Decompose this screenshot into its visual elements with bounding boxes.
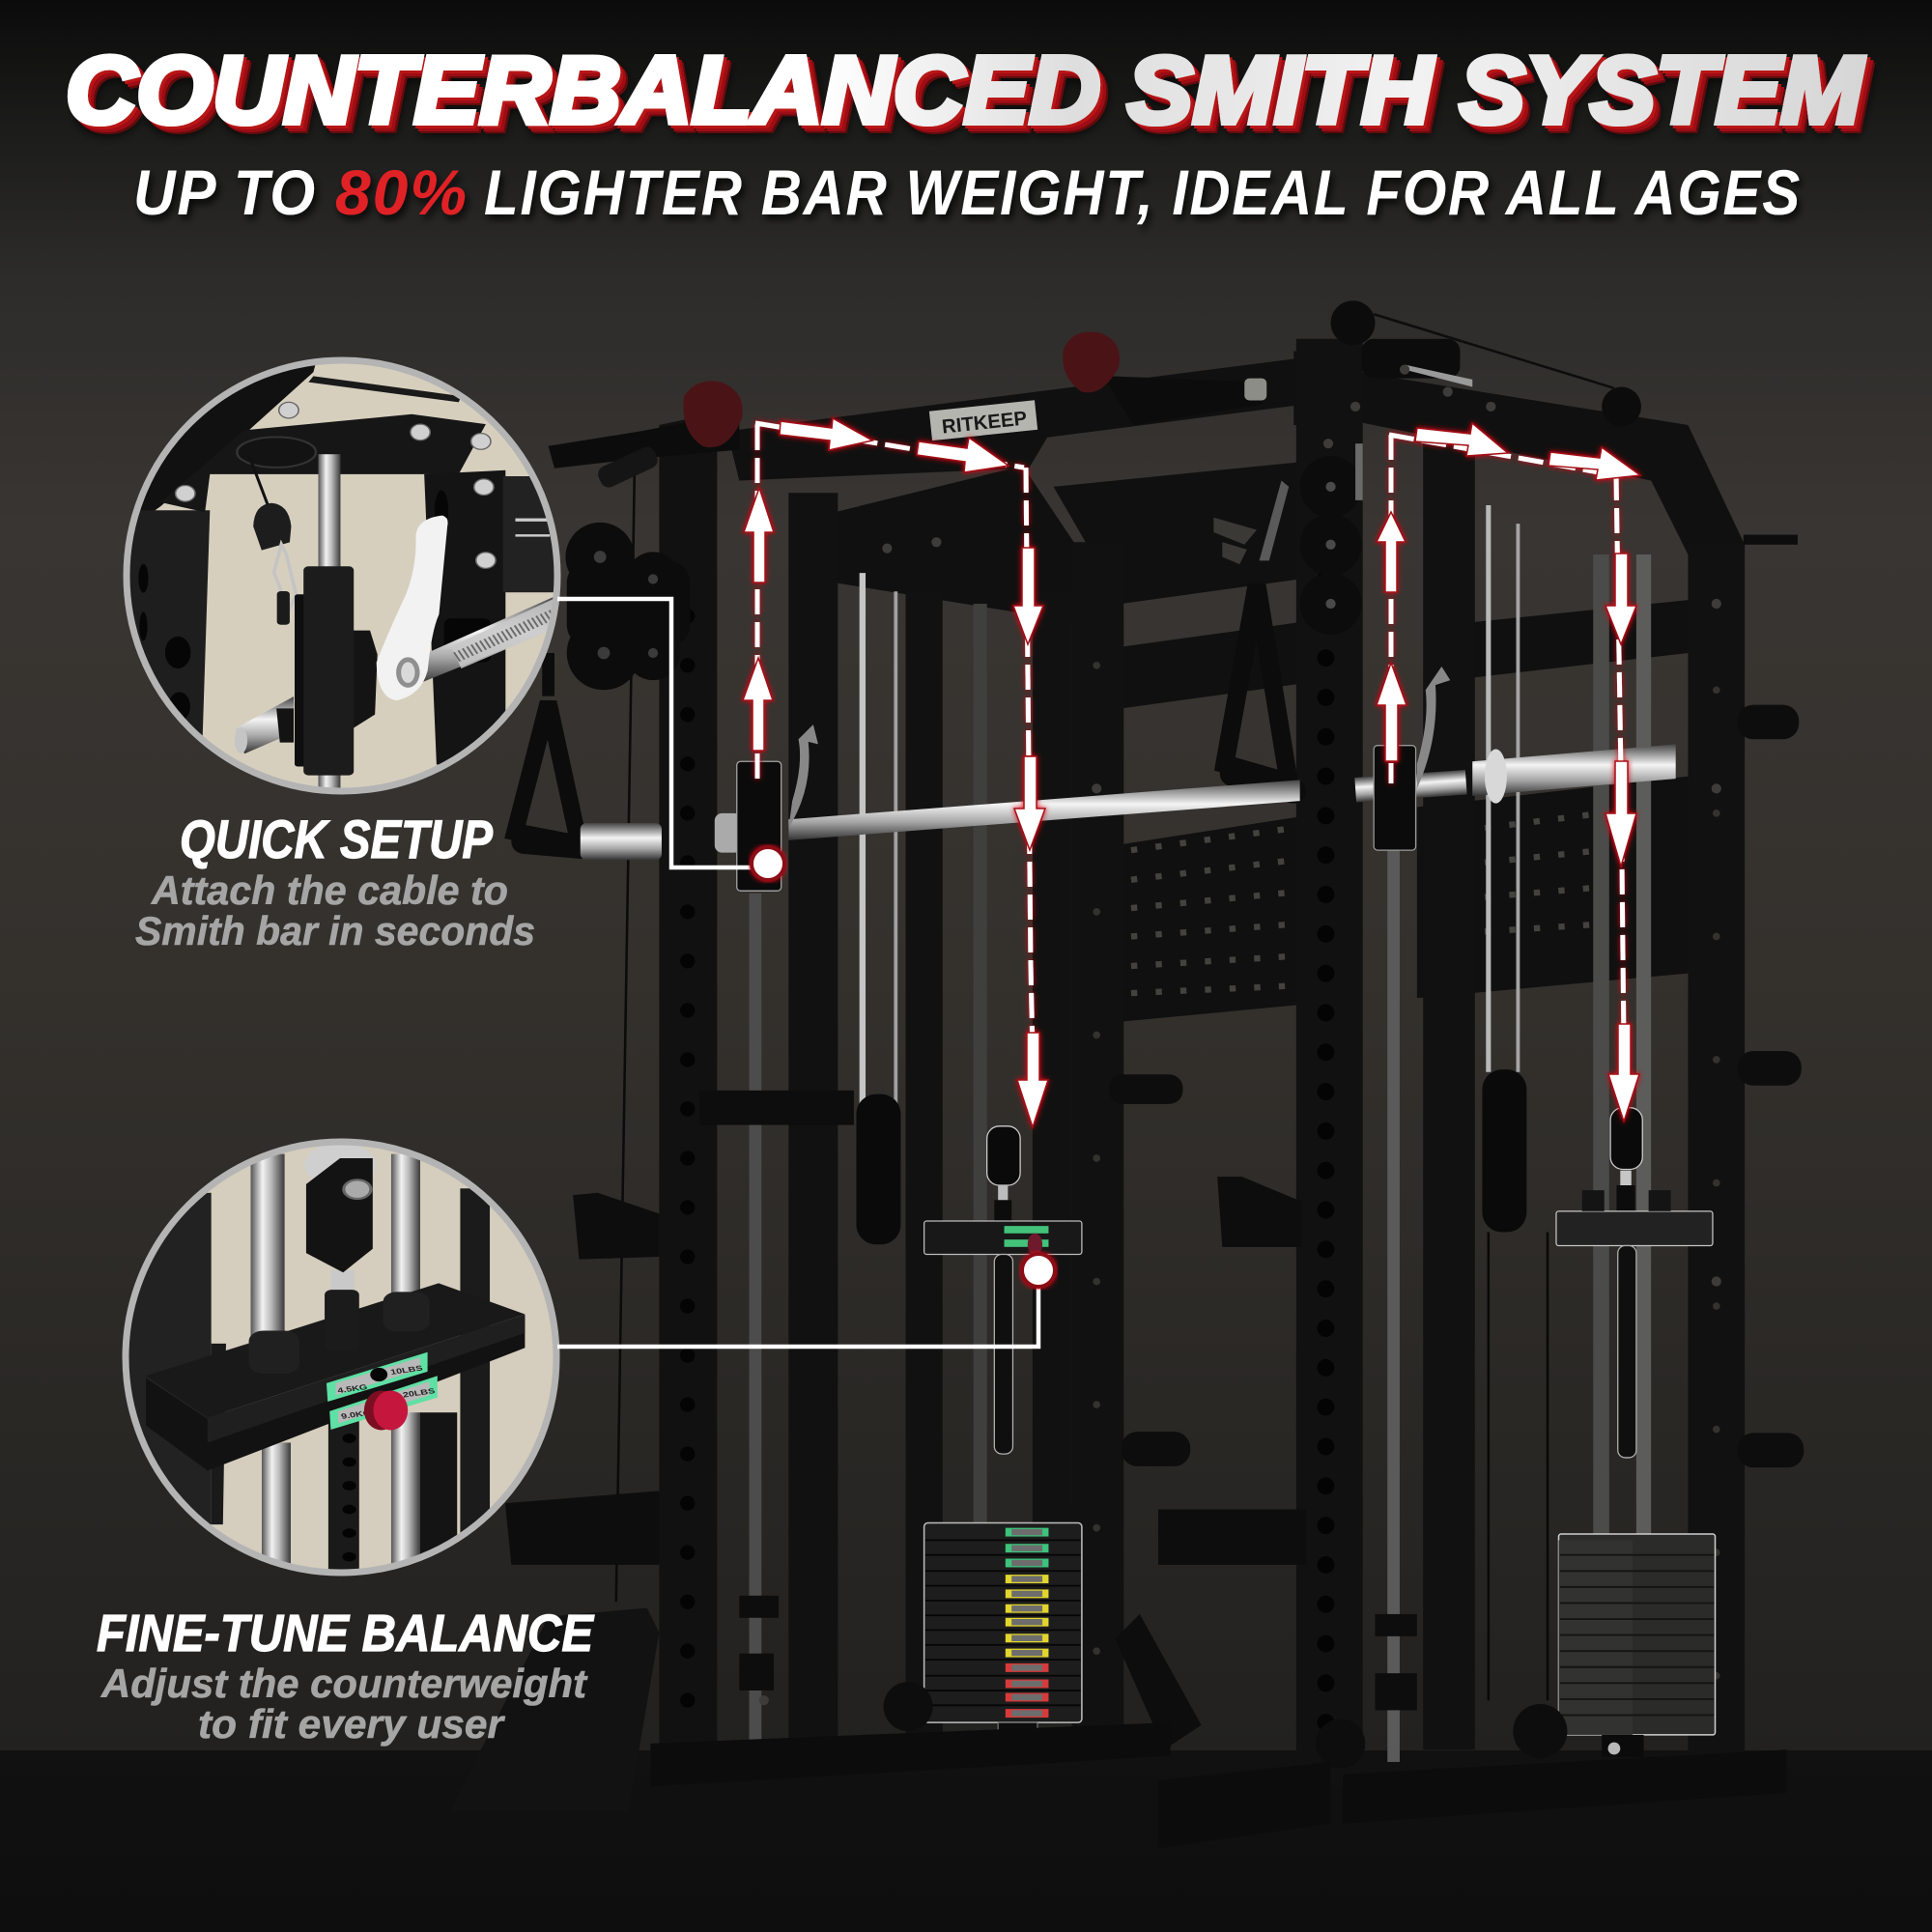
top weight label [327,1352,428,1402]
left dashed cable path [755,423,1033,1053]
plate top face [146,1283,525,1418]
caption description line 2: to fit every user [198,1701,506,1747]
inset wall [97,1111,589,1594]
callout dot: fine-tune balance [1022,1254,1055,1287]
right upright [424,470,505,764]
subtitle: 80% [335,156,469,228]
caption: fine-tune balance [97,1605,595,1747]
left rod bushing [249,1330,299,1374]
pulley wheel [304,1146,376,1179]
bottom weight label [329,1376,438,1430]
inset photo: fine-tune balance detail [122,1138,560,1577]
lower left rod [262,1442,291,1568]
floor [0,1750,1932,1932]
left top plate [924,1221,1082,1454]
cable end [253,503,291,551]
small black hook [277,591,290,625]
left bar carriage [737,724,818,891]
right top plate [1556,1190,1713,1458]
left chrome rod [251,1154,285,1344]
right panel [420,1412,457,1568]
left triangle handle [515,653,582,846]
left cable block [987,1126,1020,1225]
left pulley cluster [565,523,690,690]
pulley [237,437,316,468]
inset photo: quick setup detail [124,357,560,794]
top pulleys and grips: RITKEEP [941,408,1028,439]
plate front edge [208,1315,525,1442]
pulley block [306,1158,373,1272]
title: COUNTERBALANCED SMITH SYSTEM [66,37,1864,143]
top weight label: 10LBS [389,1364,424,1377]
callout line: fine-tune balance [557,1285,1038,1347]
center dark selector post [325,1290,359,1350]
frame bolts [759,365,1721,1705]
knurled smith bar [423,597,553,682]
chrome sleeve end [236,696,294,753]
white safety hook [377,516,448,700]
subtitle: UP TO [133,156,317,228]
plate lower block [146,1316,525,1470]
threaded connector [330,1270,355,1292]
thin top bar [308,376,461,402]
smith machine rack [450,300,1804,1848]
seat back board [450,1608,659,1811]
right dark upright [460,1188,490,1533]
lower right rod [391,1412,420,1568]
center pulley cluster [1260,443,1363,635]
cable [250,462,269,504]
gray guide rods and cables [616,314,1651,1762]
top left dark corner [140,365,315,510]
caption heading: QUICK SETUP [180,809,494,869]
black linear bearing sleeve [303,566,354,776]
smith bar [581,744,1676,860]
caption description line 1: Attach the cable to [151,867,508,913]
right weight stack [1559,1534,1716,1757]
left weight stack [924,1523,1082,1735]
left dark upright [129,1192,212,1524]
dark red top knobs [683,331,1120,447]
callout line: quick setup [557,599,753,867]
bottom weight label: 9.0KG [340,1408,372,1420]
upright hole columns [688,579,1717,1749]
carabiner [274,544,297,611]
caption description line 1: Adjust the counterweight [100,1661,588,1706]
right bar carriage [1374,667,1450,850]
rear bracket [295,594,303,767]
cable pulley blocks [856,1069,1526,1244]
frame bolts [176,402,496,568]
side pegs and j-hooks [505,535,1804,1768]
right rod bushing [384,1292,430,1331]
left and right arrows [743,418,1640,1127]
subtitle: LIGHTER BAR WEIGHT, IDEAL FOR ALL AGES [484,156,1802,228]
nut [344,1179,371,1199]
upright holes [138,491,491,721]
bottom weight label: 20LBS [402,1387,436,1399]
red pin knob [364,1390,408,1430]
center triangle handle [1225,585,1293,791]
carriage bracket plate [354,630,378,728]
inset background wall [97,338,589,818]
callout dot: quick setup [752,847,784,880]
top pulleys and grips [549,300,1641,490]
rear panel and top cross structure [727,352,1744,708]
caption description line 2: Smith bar in seconds [135,908,535,953]
silver guide rod [319,454,340,570]
wing logo on rear panel [1213,518,1257,564]
left upright [129,510,211,736]
counterbalance cable path arrows [743,418,1640,1127]
perforated selector column [328,1421,359,1572]
floor base frame [650,1722,1786,1848]
caption heading: FINE-TUNE BALANCE [97,1605,595,1662]
right dashed cable path [1389,435,1624,1043]
uprights [659,339,1745,1786]
right cable block [1610,1108,1642,1212]
top weight label: 4.5KG [336,1383,368,1395]
selector hole [370,1368,387,1381]
right chrome rod [391,1154,420,1300]
pegboard [1084,777,1688,1025]
caption: quick setup [135,809,535,953]
